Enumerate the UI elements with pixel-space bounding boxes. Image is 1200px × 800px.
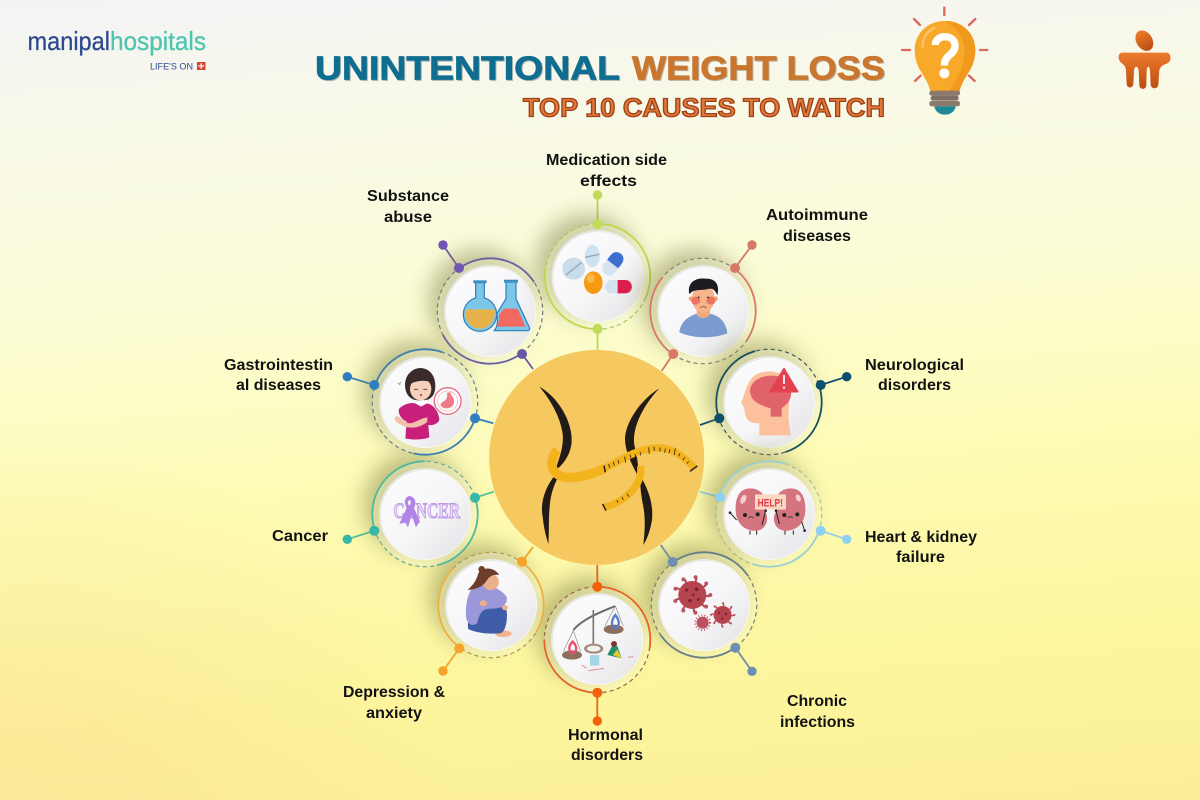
logo: Manipal Hospitals: manipal	[28, 26, 110, 56]
panel: cancer	[272, 448, 494, 580]
label: depression and anxiety: anxiety	[366, 705, 422, 722]
label: substance abuse	[367, 188, 449, 226]
panel: central waist illustration	[489, 350, 704, 565]
label: substance abuse: abuse	[384, 209, 432, 226]
title	[315, 50, 885, 86]
label: autoimmune diseases	[766, 207, 868, 245]
panel: chronic infections	[630, 531, 855, 731]
label: gastrointestinal diseases	[224, 357, 333, 394]
label: neurological disorders: disorders	[878, 377, 951, 394]
label: gastrointestinal diseases: al diseases	[236, 377, 321, 394]
panel: hormonal disorders	[535, 565, 650, 764]
icon: light bulb with question mark	[902, 8, 987, 115]
panel: autoimmune diseases	[629, 207, 868, 385]
icon: woman with stomach pain	[395, 368, 461, 439]
icon: cancer ribbon wordmark	[393, 496, 460, 527]
icon: cancer ribbon wordmark: CANCER	[393, 498, 460, 523]
label: substance abuse: Substance	[367, 188, 449, 205]
label: depression and anxiety	[343, 684, 445, 722]
icon: head with brain and warning	[741, 369, 798, 435]
label: heart and kidney failure: Heart & kidney	[865, 529, 977, 546]
label: medication side effects	[546, 152, 667, 190]
panel: depression and anxiety	[343, 531, 565, 722]
label: cancer: Cancer	[272, 528, 328, 545]
label: neurological disorders	[865, 357, 964, 394]
icon: virus particles	[674, 577, 734, 630]
label: chronic infections: infections	[780, 714, 855, 731]
panel: neurological disorders	[700, 336, 964, 468]
logo: Manipal Hospitals: LIFE'S ON	[150, 62, 193, 72]
logo: Manipal Hospitals	[28, 26, 206, 72]
label: hormonal disorders: disorders	[571, 747, 643, 764]
label: medication side effects: Medication side	[546, 152, 667, 169]
label: heart and kidney failure	[865, 529, 977, 566]
label: hormonal disorders	[568, 727, 643, 764]
icon: hormone balance scale	[562, 606, 633, 671]
label: autoimmune diseases: diseases	[783, 228, 851, 245]
icon: laboratory flasks	[463, 280, 530, 331]
panel: gastrointestinal diseases	[224, 336, 493, 468]
label: medication side effects: effects	[580, 173, 637, 190]
icon: kidneys with help sign: HELP!	[758, 497, 783, 509]
panel: heart and kidney failure	[700, 447, 977, 581]
label: chronic infections: Chronic	[787, 693, 847, 710]
panel: substance abuse	[367, 188, 564, 385]
icon: waist with measuring tape	[539, 387, 697, 545]
icon: man with facial rash	[679, 278, 727, 337]
label: gastrointestinal diseases: Gastrointestin	[224, 357, 333, 374]
label: neurological disorders: Neurological	[865, 357, 964, 374]
subtitle: TOP 10 CAUSES TO WATCH	[523, 94, 885, 122]
label: chronic infections	[780, 693, 855, 731]
icon: pills and capsules	[562, 245, 632, 294]
icon: kidneys with help sign	[729, 488, 806, 535]
label: hormonal disorders: Hormonal	[568, 727, 643, 744]
label: heart and kidney failure: failure	[896, 549, 945, 566]
panel: medication side effects	[536, 152, 667, 350]
icon: sad seated woman	[466, 566, 512, 637]
logo: Manipal emblem	[1119, 27, 1171, 89]
title: UNINTENTIONAL	[315, 50, 620, 86]
title: WEIGHT LOSS	[632, 50, 885, 86]
label: autoimmune diseases: Autoimmune	[766, 207, 868, 224]
label: depression and anxiety: Depression &	[343, 684, 445, 701]
logo: Manipal Hospitals: hospitals	[110, 26, 206, 56]
